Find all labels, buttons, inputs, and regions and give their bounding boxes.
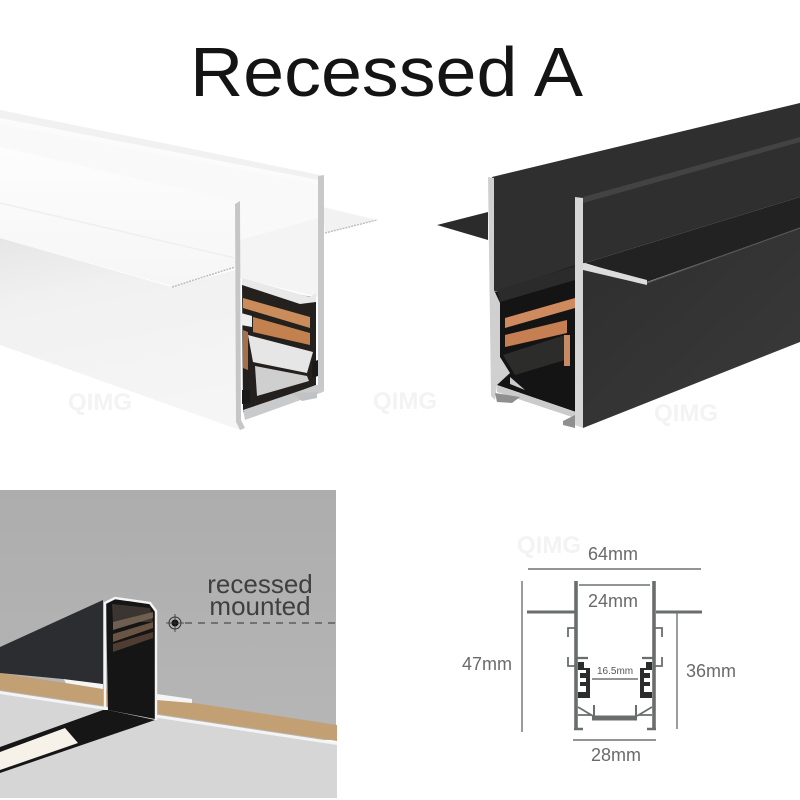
black flange edge bbox=[583, 263, 647, 285]
black profile section walls bbox=[488, 177, 510, 400]
title: Recessed A bbox=[190, 33, 583, 111]
channel front bbox=[106, 598, 155, 719]
dimension diagram bbox=[462, 544, 736, 765]
black left flange bbox=[437, 212, 488, 240]
dimension: 36mm: 36mm bbox=[686, 661, 736, 681]
cross-section drawing bbox=[527, 581, 702, 729]
ceiling slot bbox=[0, 710, 155, 773]
watermarks: QIMG bbox=[654, 400, 718, 427]
black front body bbox=[583, 228, 800, 428]
dimension: 28mm: 28mm bbox=[591, 745, 641, 765]
black interior bbox=[495, 265, 576, 412]
connector blocks bbox=[578, 662, 652, 698]
dimension: 24mm: 24mm bbox=[588, 591, 638, 611]
ceiling surface bbox=[0, 692, 337, 798]
wall background bbox=[0, 490, 336, 740]
dark side wall of channel bbox=[0, 600, 103, 684]
white right flange bbox=[323, 207, 377, 233]
panel: recessed mounting photo bbox=[0, 490, 337, 798]
dimension: 47mm: 47mm bbox=[462, 654, 512, 674]
watermarks: QIMG bbox=[68, 389, 132, 416]
white profile section walls bbox=[235, 201, 245, 430]
white plaster edges bbox=[63, 678, 103, 689]
watermarks: QIMG bbox=[373, 388, 437, 415]
black back wall bbox=[492, 103, 800, 292]
white recessed track profile bbox=[0, 110, 377, 430]
glowing light strip bbox=[0, 728, 78, 770]
channel white outline bbox=[105, 598, 156, 720]
watermarks: QIMG bbox=[517, 532, 581, 559]
white back wall bbox=[0, 110, 320, 297]
white front body bbox=[0, 238, 240, 430]
wood trim strip bbox=[0, 673, 337, 741]
dimension lines bbox=[522, 569, 701, 740]
black flange top bbox=[585, 197, 800, 282]
dashed leader line bbox=[185, 622, 337, 624]
black recessed track profile bbox=[437, 103, 800, 428]
white left flange bbox=[0, 147, 235, 286]
white interior bbox=[242, 282, 316, 412]
recessed mounted label: mounted bbox=[209, 591, 311, 621]
watermarks bbox=[68, 388, 718, 559]
dimension: 16.5mm: 16.5mm bbox=[597, 666, 633, 677]
mounting target icon bbox=[166, 614, 184, 632]
recessed mounted label: recessed bbox=[207, 569, 313, 599]
dimension: 64mm: 64mm bbox=[588, 544, 638, 564]
